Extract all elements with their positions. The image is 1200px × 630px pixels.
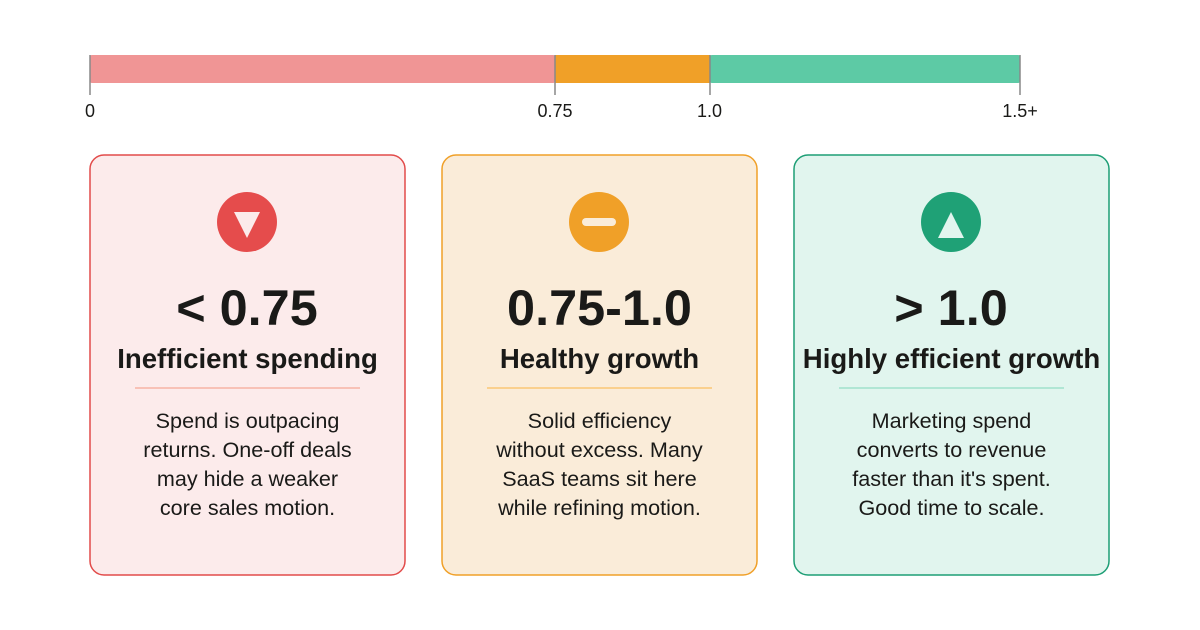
panel: inefficient spending — [89, 154, 406, 576]
description: may hide a weaker — [157, 466, 338, 491]
value: below 0.75: < 0.75 — [176, 279, 318, 336]
description: returns. One-off deals — [143, 437, 352, 462]
icon: up triangle — [921, 192, 981, 252]
heading: highly efficient growth: Highly efficient growth — [803, 343, 1100, 374]
value: 0.75 to 1.0: 0.75-1.0 — [507, 279, 692, 336]
description: core sales motion. — [160, 495, 335, 520]
description — [496, 408, 703, 520]
description: Spend is outpacing — [156, 408, 339, 433]
tick label: 1.5+: 1.5+ — [1002, 101, 1038, 121]
description: faster than it's spent. — [852, 466, 1051, 491]
tick label: 0: 0 — [85, 101, 95, 121]
description: while refining motion. — [498, 495, 701, 520]
scale bar — [85, 55, 1038, 121]
value: above 1.0: > 1.0 — [894, 279, 1008, 336]
description: converts to revenue — [857, 437, 1046, 462]
icon: minus — [569, 192, 629, 252]
heading: inefficient spending: Inefficient spending — [117, 343, 378, 374]
panel: highly efficient growth — [793, 154, 1110, 576]
description: Good time to scale. — [858, 495, 1045, 520]
heading: healthy growth: Healthy growth — [500, 343, 699, 374]
description — [143, 408, 352, 520]
panel: healthy growth — [441, 154, 758, 576]
description: SaaS teams sit here — [502, 466, 697, 491]
tick label: 1.0: 1.0 — [697, 101, 722, 121]
tick label: 0.75: 0.75 — [537, 101, 573, 121]
description: Solid efficiency — [528, 408, 671, 433]
description: Marketing spend — [872, 408, 1031, 433]
icon: down triangle — [217, 192, 277, 252]
description: without excess. Many — [496, 437, 703, 462]
description — [852, 408, 1051, 520]
